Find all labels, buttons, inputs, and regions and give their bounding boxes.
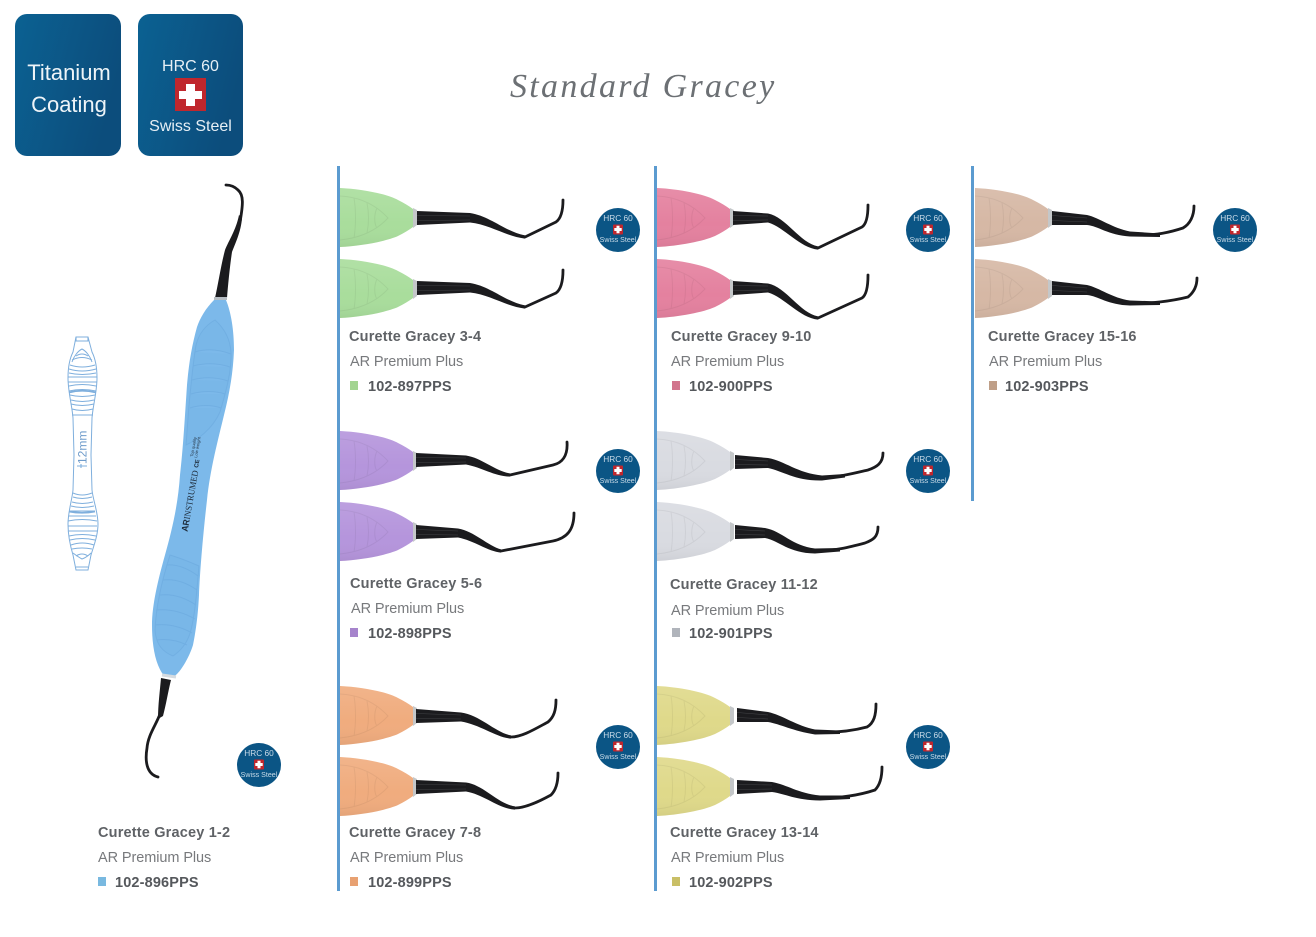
badge: small HRC 60 [237,743,281,787]
caption: AR Premium Plus [351,601,464,617]
caption: AR Premium Plus [671,354,784,370]
instruments: pair of curettes [657,188,868,320]
label: Gracey 1-2: Curette Gracey 1-2 [98,825,230,841]
caption: Curette Gracey 11-12 [670,577,818,593]
caption: AR Premium Plus [989,354,1102,370]
caption: Curette Gracey 7-8 [349,825,481,841]
handle brand text: ARINSTRUMED [180,469,200,532]
panel: Gracey 11-12 [657,431,950,642]
caption [988,329,1137,395]
caption: AR Premium Plus [671,603,784,619]
diagram: 12mm handle blueprint: 12mm [76,431,90,464]
instruments: pair of curettes [975,188,1197,318]
caption [350,576,482,642]
caption [670,577,818,642]
caption: 102-899PPS [368,875,452,891]
caption [671,329,811,395]
badge: small HRC 60: HRC 60 [913,454,943,464]
caption: 102-903PPS [1005,379,1089,395]
instrument: Curette Gracey 1-2: CE [194,459,201,468]
lower grip [155,555,199,656]
badge: small HRC 60: Swiss Steel [910,477,947,485]
instruments: pair of curettes [340,188,563,318]
caption: 102-898PPS [368,626,452,642]
badge: small HRC 60: Swiss Steel [1217,236,1254,244]
caption: Curette Gracey 13-14 [670,825,819,841]
panel: Gracey 5-6 [340,431,640,642]
caption: Curette Gracey 3-4 [349,329,481,345]
instrument: Curette Gracey 1-2: Top quality [189,436,198,457]
instruments: pair of curettes [340,686,558,816]
instruments: pair of curettes [340,431,574,561]
badge: small HRC 60: Swiss Steel [910,753,947,761]
column dividers [337,166,974,891]
panel: Gracey 13-14 [657,686,950,891]
badge: HRC 60 Swiss Steel [138,14,243,156]
caption: 102-902PPS [689,875,773,891]
badge: small HRC 60: HRC 60 [244,748,274,758]
caption: AR Premium Plus [350,850,463,866]
badge: small HRC 60: HRC 60 [913,730,943,740]
caption: 102-900PPS [689,379,773,395]
badge: small HRC 60: HRC 60 [603,213,633,223]
caption [349,329,481,395]
instruments: pair of curettes [657,431,883,561]
badge: small HRC 60: Swiss Steel [600,477,637,485]
caption: 102-897PPS [368,379,452,395]
label: Gracey 1-2: 102-896PPS [115,875,199,891]
instrument: Curette Gracey 1-2 [146,185,242,777]
badge: small HRC 60 [596,208,640,252]
badge: small HRC 60: Swiss Steel [241,771,278,779]
instruments: pair of curettes [657,686,882,816]
title: Standard Gracey [510,68,776,105]
caption: 102-901PPS [689,626,773,642]
handle [152,300,234,677]
panel: Gracey 7-8 [340,686,640,891]
badge: small HRC 60 [596,725,640,769]
panel: Gracey 15-16 [975,188,1257,395]
badge: small HRC 60: HRC 60 [603,454,633,464]
diagram: 12mm handle blueprint [68,337,98,570]
caption [349,825,481,891]
label: Gracey 1-2 [98,825,230,891]
panel: Gracey 9-10 [657,188,950,395]
label: Gracey 1-2: AR Premium Plus [98,850,211,866]
badge: small HRC 60: Swiss Steel [600,236,637,244]
badge: HRC 60 Swiss Steel: HRC 60 [162,58,219,75]
caption: Curette Gracey 15-16 [988,329,1137,345]
upper working end [215,185,242,298]
upper grip [186,320,231,445]
badge: small HRC 60: HRC 60 [1220,213,1250,223]
badge: small HRC 60 [906,725,950,769]
badge: small HRC 60 [596,449,640,493]
caption [670,825,819,891]
caption: AR Premium Plus [671,850,784,866]
badge: small HRC 60 [1213,208,1257,252]
badge: small HRC 60: HRC 60 [603,730,633,740]
panel: Gracey 3-4 [340,188,640,395]
caption: Curette Gracey 9-10 [671,329,811,345]
badge: Titanium Coating: Titanium [27,60,111,85]
badge: HRC 60 Swiss Steel: Swiss Steel [149,118,232,135]
caption: Curette Gracey 5-6 [350,576,482,592]
badge: Titanium Coating: Coating [31,92,107,117]
badge: small HRC 60 [906,449,950,493]
instrument: Curette Gracey 1-2: Low weight [193,436,202,458]
badge: small HRC 60: Swiss Steel [910,236,947,244]
badge: Titanium Coating [15,14,121,156]
badge: small HRC 60: HRC 60 [913,213,943,223]
caption: AR Premium Plus [350,354,463,370]
badge: small HRC 60: Swiss Steel [600,753,637,761]
badge: small HRC 60 [906,208,950,252]
lower working end [146,678,171,777]
